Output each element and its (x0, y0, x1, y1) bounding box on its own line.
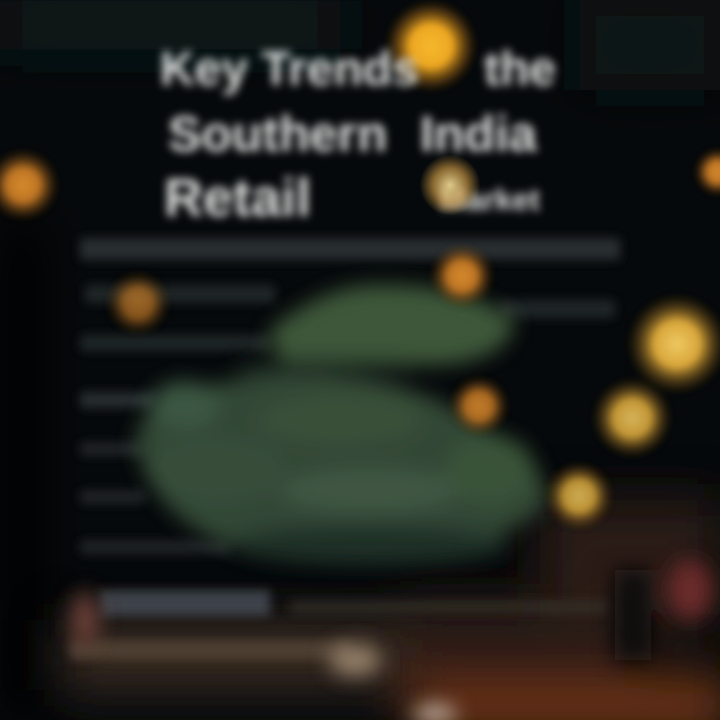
title: Retail (164, 168, 311, 228)
title: India (420, 106, 537, 162)
glowing lights (0, 0, 720, 530)
title highlight lamp (420, 155, 480, 215)
title: Market (440, 182, 540, 217)
title: Key Trends (160, 43, 419, 96)
title: the (484, 43, 556, 96)
blurred text rows (70, 238, 620, 660)
green foliage (135, 285, 548, 565)
warm lower right floor glow (60, 500, 720, 720)
title: Southern (168, 106, 387, 162)
lower scene details (71, 560, 712, 720)
title (156, 43, 560, 228)
